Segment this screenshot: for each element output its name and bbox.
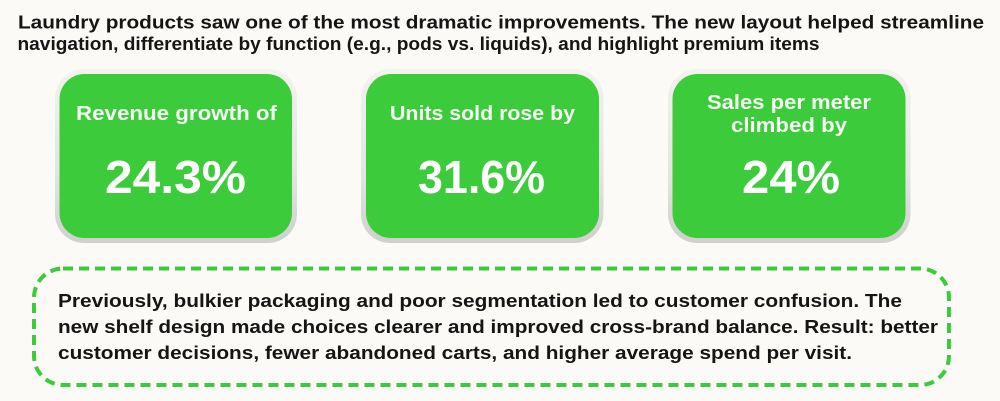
callout text: new shelf design made choices clearer and improved cross-brand balance. Result: better <box>58 316 938 337</box>
label: sales per meter: climbed by <box>731 115 848 137</box>
heading text: Laundry products saw one of the most dramatic improvements. The new layout helped streamline <box>18 12 984 32</box>
heading text: navigation, differentiate by function (e.g., pods vs. liquids), and highlight premium items <box>18 33 819 54</box>
callout text: Previously, bulkier packaging and poor segmentation led to customer confusion. The <box>58 290 902 311</box>
label: units sold: Units sold rose by <box>390 103 576 125</box>
label: sales per meter: Sales per meter <box>707 92 871 114</box>
callout text: customer decisions, fewer abandoned carts, and higher average spend per visit. <box>58 342 852 363</box>
value: 24.3%: 24.3% <box>105 151 246 203</box>
label: sales per meter <box>707 92 871 137</box>
label: revenue growth: Revenue growth of <box>76 103 277 125</box>
heading text <box>18 12 984 54</box>
panel: sales per meter <box>668 69 910 243</box>
value: 31.6%: 31.6% <box>418 151 545 203</box>
value: 24%: 24% <box>742 151 840 203</box>
panel: units sold <box>361 69 604 243</box>
panel: revenue growth <box>55 69 297 243</box>
callout text <box>58 290 938 363</box>
callout panel <box>34 268 949 385</box>
